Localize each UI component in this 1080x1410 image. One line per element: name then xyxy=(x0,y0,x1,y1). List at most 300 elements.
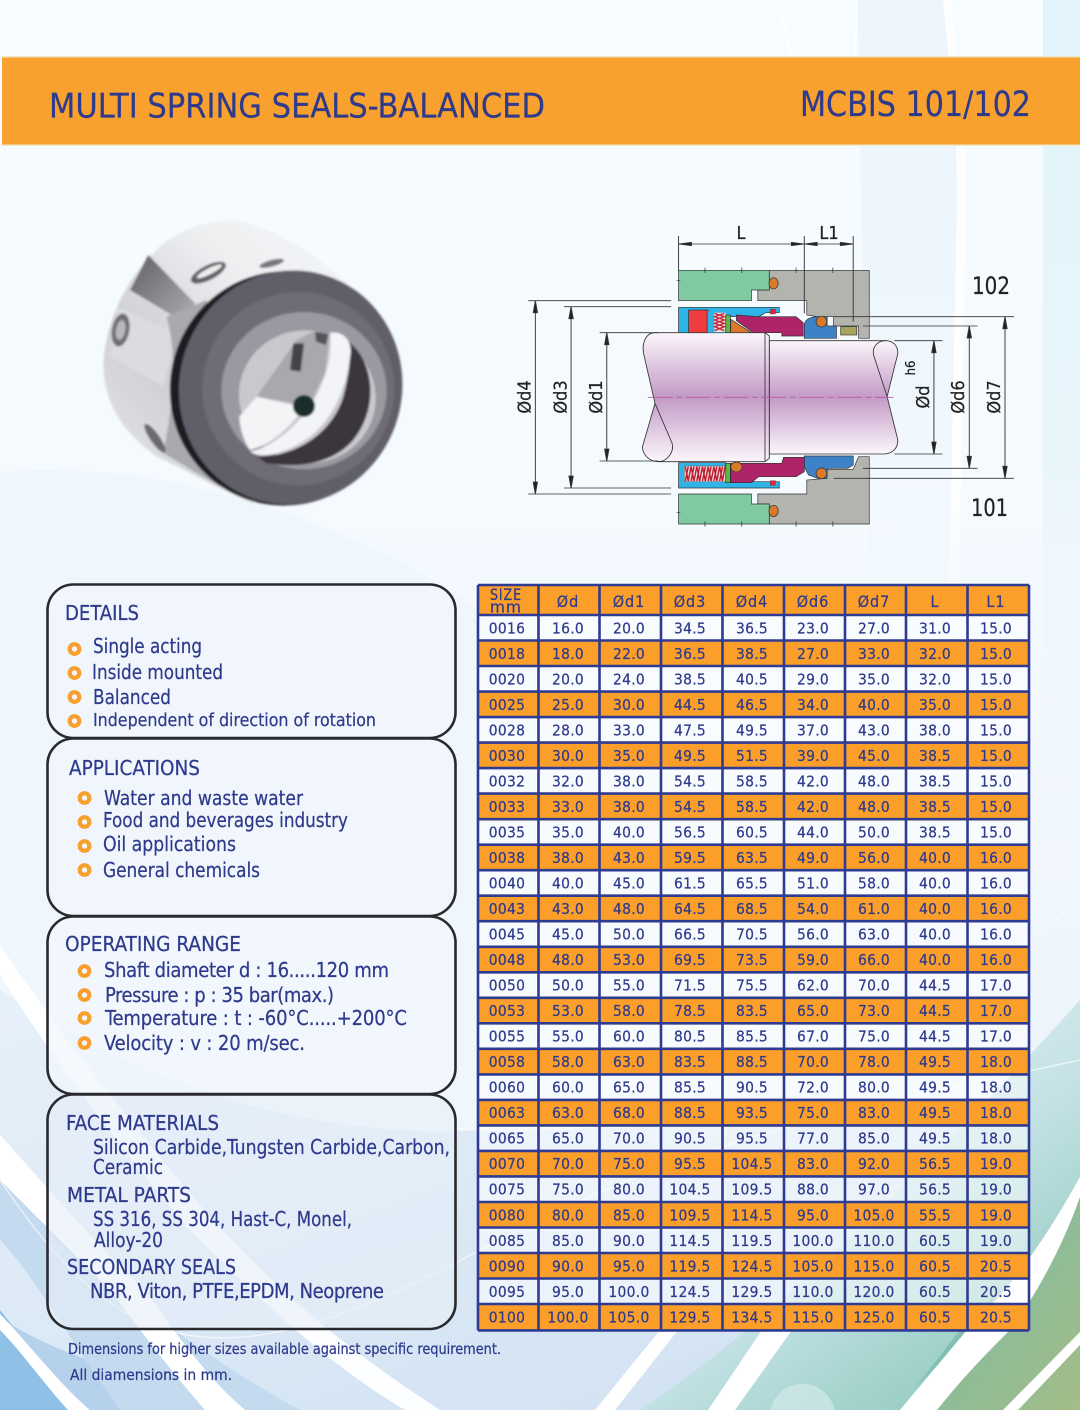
list: operating range xyxy=(80,958,407,1055)
row 0060: 60.0 xyxy=(552,1079,584,1097)
row 0085: 119.5 xyxy=(731,1232,773,1250)
row 0032: 42.0 xyxy=(797,772,829,790)
row 0065: 95.5 xyxy=(736,1130,768,1148)
heading: face materials: FACE MATERIALS xyxy=(66,1111,219,1135)
row 0040: 0040 xyxy=(489,874,525,892)
row 0095: 0095 xyxy=(489,1283,525,1301)
row 0040: 58.0 xyxy=(858,874,890,892)
row 0033: 15.0 xyxy=(980,798,1012,816)
row 0016: 34.5 xyxy=(674,619,706,637)
row 0018: 22.0 xyxy=(613,645,645,663)
row 0032: 38.5 xyxy=(919,772,951,790)
row 0032: 48.0 xyxy=(858,772,890,790)
row 0043: 48.0 xyxy=(613,900,645,918)
row 0020: 29.0 xyxy=(797,670,829,688)
row 0033: 54.5 xyxy=(674,798,706,816)
row 0065: 0065 xyxy=(489,1130,525,1148)
row 0048 xyxy=(478,947,1029,972)
row 0075: 75.0 xyxy=(552,1181,584,1199)
row 0065: 77.0 xyxy=(797,1130,829,1148)
row 0058: 88.5 xyxy=(736,1053,768,1071)
row 0035: 35.0 xyxy=(552,824,584,842)
row 0050 xyxy=(489,977,1012,995)
row 0063: 49.5 xyxy=(919,1104,951,1122)
row 0035: 38.5 xyxy=(919,824,951,842)
row 0035: 15.0 xyxy=(980,824,1012,842)
row 0053: 0053 xyxy=(489,1002,525,1020)
row 0075: 104.5 xyxy=(669,1181,711,1199)
row 0100: 100.0 xyxy=(547,1308,589,1326)
row 0065: 18.0 xyxy=(980,1130,1012,1148)
row 0025: 35.0 xyxy=(919,696,951,714)
title: MULTI SPRING SEALS-BALANCED xyxy=(49,86,545,126)
row 0085: 110.0 xyxy=(853,1232,895,1250)
row 0095: 95.0 xyxy=(552,1283,584,1301)
table header row: Ød1 xyxy=(613,592,645,611)
seat and gland, type 102 xyxy=(677,268,869,338)
row 0016: 20.0 xyxy=(613,619,645,637)
row 0055: 67.0 xyxy=(797,1028,829,1046)
row 0028: 38.0 xyxy=(919,721,951,739)
heading: operating range: OPERATING RANGE xyxy=(65,932,241,956)
row 0016: 0016 xyxy=(489,619,525,637)
row 0050: 55.0 xyxy=(613,977,645,995)
row 0050: 17.0 xyxy=(980,977,1012,995)
row 0075: 109.5 xyxy=(731,1181,773,1199)
row 0065: 65.0 xyxy=(552,1130,584,1148)
row 0090: 0090 xyxy=(489,1257,525,1275)
row 0095: 100.0 xyxy=(608,1283,650,1301)
row 0016: 31.0 xyxy=(919,619,951,637)
row 0016: 15.0 xyxy=(980,619,1012,637)
table header row: mm xyxy=(490,598,522,616)
row 0033: 48.0 xyxy=(858,798,890,816)
row 0035 xyxy=(489,824,1012,842)
row 0045: 63.0 xyxy=(858,926,890,944)
row 0060: 90.5 xyxy=(736,1079,768,1097)
row 0070: 83.0 xyxy=(797,1155,829,1173)
row 0040: 51.0 xyxy=(797,874,829,892)
text: metal parts: Alloy-20 xyxy=(94,1228,163,1252)
text: secondary seals: NBR, Viton, PTFE,EPDM, Neoprene xyxy=(90,1279,384,1303)
row 0063: 93.5 xyxy=(736,1104,768,1122)
row 0043: 43.0 xyxy=(552,900,584,918)
list: applications: Food and beverages industry xyxy=(103,808,348,832)
row 0060: 18.0 xyxy=(980,1079,1012,1097)
row 0035: 44.0 xyxy=(797,824,829,842)
row 0018: 32.0 xyxy=(919,645,951,663)
row 0045 xyxy=(489,926,1012,944)
text: face materials: Ceramic xyxy=(93,1155,163,1179)
row 0048: 66.0 xyxy=(858,951,890,969)
row 0100: 60.5 xyxy=(919,1308,951,1326)
row 0100: 134.5 xyxy=(731,1308,773,1326)
row 0030: 45.0 xyxy=(858,747,890,765)
row 0060: 49.5 xyxy=(919,1079,951,1097)
dimension labels: 102 xyxy=(972,272,1010,300)
row 0050: 62.0 xyxy=(797,977,829,995)
row 0030: 49.5 xyxy=(674,747,706,765)
row 0063 xyxy=(478,1100,1029,1126)
row 0080: 0080 xyxy=(489,1206,525,1224)
panel: operating range xyxy=(48,916,456,1094)
row 0048: 0048 xyxy=(489,951,525,969)
table header row xyxy=(478,585,1029,616)
row 0045: 0045 xyxy=(489,926,525,944)
row 0043: 0043 xyxy=(489,900,525,918)
row 0035: 50.0 xyxy=(858,824,890,842)
row 0095: 129.5 xyxy=(731,1283,773,1301)
row 0085: 90.0 xyxy=(613,1232,645,1250)
row 0018: 18.0 xyxy=(552,645,584,663)
row 0030: 51.5 xyxy=(736,747,768,765)
row 0053: 17.0 xyxy=(980,1002,1012,1020)
row 0060: 85.5 xyxy=(674,1079,706,1097)
dimension table xyxy=(478,585,1029,1330)
row 0030 xyxy=(478,743,1029,768)
row 0045: 56.0 xyxy=(797,926,829,944)
table body rows xyxy=(478,619,1029,1330)
row 0016: 36.5 xyxy=(736,619,768,637)
row 0060: 0060 xyxy=(489,1079,525,1097)
row 0048: 53.0 xyxy=(613,951,645,969)
row 0050: 70.0 xyxy=(858,977,890,995)
table header row: L xyxy=(930,592,940,611)
row 0048: 16.0 xyxy=(980,951,1012,969)
row 0020: 20.0 xyxy=(552,670,584,688)
row 0025: 15.0 xyxy=(980,696,1012,714)
row 0028: 49.5 xyxy=(736,721,768,739)
list: details xyxy=(70,634,376,731)
row 0043 xyxy=(478,896,1029,921)
row 0075: 97.0 xyxy=(858,1181,890,1199)
row 0033: 33.0 xyxy=(552,798,584,816)
dimension labels: Ød4 xyxy=(514,380,536,414)
row 0032: 32.0 xyxy=(552,772,584,790)
row 0095: 124.5 xyxy=(669,1283,711,1301)
row 0070: 56.5 xyxy=(919,1155,951,1173)
row 0060: 65.0 xyxy=(613,1079,645,1097)
row 0038: 63.5 xyxy=(736,849,768,867)
heading: metal parts: METAL PARTS xyxy=(67,1183,191,1207)
row 0090: 95.0 xyxy=(613,1257,645,1275)
row 0032: 38.0 xyxy=(613,772,645,790)
row 0080: 85.0 xyxy=(613,1206,645,1224)
row 0020: 40.5 xyxy=(736,670,768,688)
row 0043: 54.0 xyxy=(797,900,829,918)
row 0045: 16.0 xyxy=(980,926,1012,944)
row 0095: 120.0 xyxy=(853,1283,895,1301)
row 0053: 53.0 xyxy=(552,1002,584,1020)
row 0085: 0085 xyxy=(489,1232,525,1250)
row 0050: 44.5 xyxy=(919,977,951,995)
row 0058: 0058 xyxy=(489,1053,525,1071)
row 0028: 47.5 xyxy=(674,721,706,739)
row 0048: 59.0 xyxy=(797,951,829,969)
row 0030: 38.5 xyxy=(919,747,951,765)
row 0043: 68.5 xyxy=(736,900,768,918)
row 0090: 105.0 xyxy=(792,1257,834,1275)
row 0058 xyxy=(478,1049,1029,1074)
row 0063: 88.5 xyxy=(674,1104,706,1122)
row 0016 xyxy=(489,619,1012,637)
row 0048: 73.5 xyxy=(736,951,768,969)
row 0028: 0028 xyxy=(489,721,525,739)
dimension labels: Ød1 xyxy=(586,380,607,414)
row 0018: 38.5 xyxy=(736,645,768,663)
row 0065: 85.0 xyxy=(858,1130,890,1148)
row 0055: 60.0 xyxy=(613,1028,645,1046)
row 0032: 58.5 xyxy=(736,772,768,790)
row 0038: 56.0 xyxy=(858,849,890,867)
row 0025: 30.0 xyxy=(613,696,645,714)
row 0025: 34.0 xyxy=(797,696,829,714)
table header row: Ød6 xyxy=(797,592,829,611)
row 0090: 90.0 xyxy=(552,1257,584,1275)
dimension labels: Ød7 xyxy=(984,380,1005,414)
row 0058: 78.0 xyxy=(858,1053,890,1071)
row 0016: 16.0 xyxy=(552,619,584,637)
row 0070: 0070 xyxy=(489,1155,525,1173)
row 0053: 58.0 xyxy=(613,1002,645,1020)
row 0060: 80.0 xyxy=(858,1079,890,1097)
row 0045: 40.0 xyxy=(919,926,951,944)
table header row: L1 xyxy=(986,592,1006,611)
row 0018: 15.0 xyxy=(980,645,1012,663)
row 0025: 25.0 xyxy=(552,696,584,714)
row 0065: 90.5 xyxy=(674,1130,706,1148)
row 0070: 19.0 xyxy=(980,1155,1012,1173)
heading: secondary seals: SECONDARY SEALS xyxy=(67,1255,236,1279)
list: applications xyxy=(80,786,348,882)
row 0032: 54.5 xyxy=(674,772,706,790)
row 0085: 85.0 xyxy=(552,1232,584,1250)
row 0075: 0075 xyxy=(489,1181,525,1199)
row 0070: 70.0 xyxy=(552,1155,584,1173)
row 0038: 43.0 xyxy=(613,849,645,867)
row 0075: 56.5 xyxy=(919,1181,951,1199)
dimension labels: Ød6 xyxy=(948,380,969,414)
row 0040: 45.0 xyxy=(613,874,645,892)
row 0065: 49.5 xyxy=(919,1130,951,1148)
row 0040: 40.0 xyxy=(552,874,584,892)
row 0028: 33.0 xyxy=(613,721,645,739)
row 0053: 73.0 xyxy=(858,1002,890,1020)
row 0020: 35.0 xyxy=(858,670,890,688)
row 0050: 0050 xyxy=(489,977,525,995)
row 0033: 58.5 xyxy=(736,798,768,816)
row 0040 xyxy=(489,874,1012,892)
row 0043: 16.0 xyxy=(980,900,1012,918)
row 0048: 40.0 xyxy=(919,951,951,969)
row 0053: 65.0 xyxy=(797,1002,829,1020)
row 0038: 40.0 xyxy=(919,849,951,867)
row 0035: 0035 xyxy=(489,824,525,842)
row 0055: 17.0 xyxy=(980,1028,1012,1046)
row 0063: 63.0 xyxy=(552,1104,584,1122)
row 0100: 105.0 xyxy=(608,1308,650,1326)
heading: applications: APPLICATIONS xyxy=(69,756,200,780)
row 0032: 0032 xyxy=(489,772,525,790)
row 0038: 0038 xyxy=(489,849,525,867)
row 0090: 20.5 xyxy=(980,1257,1012,1275)
row 0080: 95.0 xyxy=(797,1206,829,1224)
table header row: Ød xyxy=(557,592,579,611)
row 0033 xyxy=(478,794,1029,819)
row 0043: 61.0 xyxy=(858,900,890,918)
text: face materials: Silicon Carbide,Tungsten Carbide,Carbon, xyxy=(93,1135,450,1159)
row 0065: 70.0 xyxy=(613,1130,645,1148)
list: operating range: Shaft diameter d : 16.....120 mm xyxy=(104,958,389,982)
panel: materials xyxy=(48,1094,456,1329)
panel: details xyxy=(48,584,456,738)
row 0055: 44.5 xyxy=(919,1028,951,1046)
table header row: SIZE xyxy=(490,585,522,604)
row 0035: 60.5 xyxy=(736,824,768,842)
row 0033: 42.0 xyxy=(797,798,829,816)
table header row: Ød4 xyxy=(736,592,768,611)
row 0100: 20.5 xyxy=(980,1308,1012,1326)
row 0020: 38.5 xyxy=(674,670,706,688)
row 0028: 43.0 xyxy=(858,721,890,739)
row 0025: 44.5 xyxy=(674,696,706,714)
dimension lines xyxy=(528,236,1014,494)
row 0058: 83.5 xyxy=(674,1053,706,1071)
row 0020: 24.0 xyxy=(613,670,645,688)
list: operating range: Velocity : v : 20 m/sec. xyxy=(104,1031,305,1055)
list: details: Single acting xyxy=(93,634,202,658)
table header row: Ød7 xyxy=(858,592,890,611)
row 0058: 18.0 xyxy=(980,1053,1012,1071)
row 0045: 50.0 xyxy=(613,926,645,944)
row 0020: 15.0 xyxy=(980,670,1012,688)
row 0080: 105.0 xyxy=(853,1206,895,1224)
row 0033: 38.0 xyxy=(613,798,645,816)
row 0085: 100.0 xyxy=(792,1232,834,1250)
row 0018 xyxy=(478,640,1029,666)
row 0030: 0030 xyxy=(489,747,525,765)
row 0032: 15.0 xyxy=(980,772,1012,790)
row 0095: 110.0 xyxy=(792,1283,834,1301)
dimension labels: h6 xyxy=(904,361,919,375)
dimension labels: 101 xyxy=(971,494,1008,522)
row 0070 xyxy=(478,1151,1029,1176)
row 0075: 80.0 xyxy=(613,1181,645,1199)
row 0070: 75.0 xyxy=(613,1155,645,1173)
row 0063: 68.0 xyxy=(613,1104,645,1122)
list: applications: Water and waste water xyxy=(104,786,304,810)
text: metal parts: SS 316, SS 304, Hast-C, Monel, xyxy=(93,1207,352,1231)
row 0040: 16.0 xyxy=(980,874,1012,892)
row 0080: 114.5 xyxy=(731,1206,773,1224)
row 0070: 104.5 xyxy=(731,1155,773,1173)
footnotes: All diamensions in mm. xyxy=(70,1366,232,1384)
row 0090: 115.0 xyxy=(853,1257,895,1275)
row 0030: 30.0 xyxy=(552,747,584,765)
row 0040: 40.0 xyxy=(919,874,951,892)
row 0053: 78.5 xyxy=(674,1002,706,1020)
row 0028: 37.0 xyxy=(797,721,829,739)
row 0063: 83.0 xyxy=(858,1104,890,1122)
row 0030: 35.0 xyxy=(613,747,645,765)
row 0055: 75.0 xyxy=(858,1028,890,1046)
row 0016: 23.0 xyxy=(797,619,829,637)
row 0048: 48.0 xyxy=(552,951,584,969)
row 0025: 46.5 xyxy=(736,696,768,714)
panel: applications xyxy=(48,738,456,916)
row 0100: 0100 xyxy=(489,1308,525,1326)
white bands xyxy=(0,945,440,1410)
technical cross-section drawing xyxy=(514,223,1014,527)
row 0075 xyxy=(489,1181,1012,1199)
row 0055: 85.5 xyxy=(736,1028,768,1046)
dimension labels xyxy=(514,223,1010,522)
row 0038 xyxy=(478,845,1029,870)
row 0090: 60.5 xyxy=(919,1257,951,1275)
list: details: Independent of direction of rotation xyxy=(93,710,376,731)
row 0030: 15.0 xyxy=(980,747,1012,765)
heading: details: DETAILS xyxy=(65,601,139,625)
row 0058: 63.0 xyxy=(613,1053,645,1071)
row 0030: 39.0 xyxy=(797,747,829,765)
row 0025: 0025 xyxy=(489,696,525,714)
row 0035: 40.0 xyxy=(613,824,645,842)
row 0085: 19.0 xyxy=(980,1232,1012,1250)
row 0075: 19.0 xyxy=(980,1181,1012,1199)
row 0055 xyxy=(489,1028,1012,1046)
row 0063: 75.0 xyxy=(797,1104,829,1122)
row 0063: 18.0 xyxy=(980,1104,1012,1122)
row 0045: 45.0 xyxy=(552,926,584,944)
row 0063: 0063 xyxy=(489,1104,525,1122)
list: details: Balanced xyxy=(93,685,171,709)
header banner xyxy=(2,56,1080,146)
row 0038: 59.5 xyxy=(674,849,706,867)
row 0080 xyxy=(478,1202,1029,1228)
row 0038: 38.0 xyxy=(552,849,584,867)
row 0080: 109.5 xyxy=(669,1206,711,1224)
row 0032 xyxy=(489,772,1012,790)
row 0018: 27.0 xyxy=(797,645,829,663)
row 0048: 69.5 xyxy=(674,951,706,969)
row 0095: 20.5 xyxy=(980,1283,1012,1301)
row 0033: 38.5 xyxy=(919,798,951,816)
product photo: seal xyxy=(103,221,429,531)
row 0070: 95.5 xyxy=(674,1155,706,1173)
row 0018: 33.0 xyxy=(858,645,890,663)
row 0050: 71.5 xyxy=(674,977,706,995)
dimension labels: Ød3 xyxy=(550,380,572,414)
row 0053: 83.5 xyxy=(736,1002,768,1020)
list: operating range: Temperature : t : -60°C.....+200°C xyxy=(104,1006,407,1030)
row 0058: 49.5 xyxy=(919,1053,951,1071)
row 0100: 125.0 xyxy=(853,1308,895,1326)
row 0058: 58.0 xyxy=(552,1053,584,1071)
row 0025 xyxy=(478,692,1029,717)
shaft xyxy=(642,333,898,462)
model number: MCBIS 101/102 xyxy=(800,85,1031,125)
row 0058: 70.0 xyxy=(797,1053,829,1071)
dimension labels: Ød xyxy=(913,385,934,409)
row 0018: 36.5 xyxy=(674,645,706,663)
row 0070: 92.0 xyxy=(858,1155,890,1173)
row 0053: 44.5 xyxy=(919,1002,951,1020)
row 0100: 129.5 xyxy=(669,1308,711,1326)
row 0060 xyxy=(489,1079,1012,1097)
row 0033: 0033 xyxy=(489,798,525,816)
row 0053 xyxy=(478,998,1029,1023)
row 0055: 0055 xyxy=(489,1028,525,1046)
